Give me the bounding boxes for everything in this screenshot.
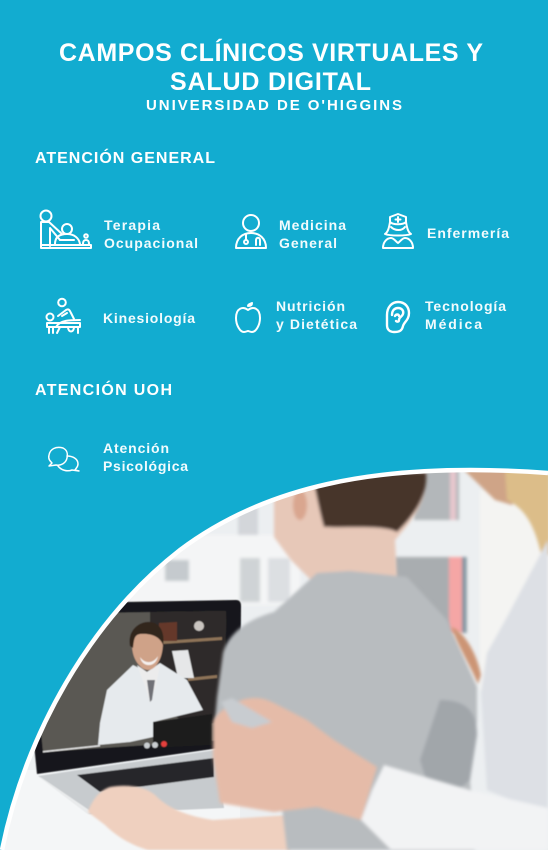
label: Kinesiología: [103, 310, 195, 326]
label: Tecnología: [425, 298, 506, 314]
label: Psicológica: [103, 458, 188, 474]
woman hair: [505, 470, 548, 555]
label: [103, 440, 188, 474]
item: nutrición y dietética: [236, 298, 357, 332]
woman fingers: [451, 627, 481, 684]
item: kinesiología: [46, 299, 195, 333]
doctor coat: [98, 663, 203, 745]
item: enfermería: [383, 214, 509, 248]
title: CAMPOS CLÍNICOS VIRTUALES Y: [59, 38, 483, 67]
screen highlight: [43, 745, 100, 752]
label: [104, 217, 198, 251]
window: [164, 472, 469, 635]
icon: burbujas de diálogo: [49, 447, 79, 471]
child hand and forearm: [88, 786, 290, 850]
label: Ocupacional: [104, 235, 198, 251]
label: Medicina: [279, 217, 346, 233]
call buttons: [144, 742, 150, 748]
screen image: wall: [41, 612, 215, 752]
label: Terapia: [104, 217, 160, 233]
label: General: [279, 235, 337, 251]
label: [425, 298, 506, 332]
bookshelf: [163, 637, 222, 681]
label: Enfermería: [427, 225, 509, 241]
icon: manzana: [236, 303, 260, 332]
laptop base: [38, 750, 224, 814]
heading: atención general: ATENCIÓN GENERAL: [35, 148, 215, 167]
child shirt: [215, 571, 477, 850]
child head and neck: [274, 470, 426, 580]
item: atención psicológica: [49, 440, 188, 474]
table: [0, 770, 240, 850]
sleeve: [361, 765, 548, 850]
label: Nutrición: [276, 298, 345, 314]
item: terapia ocupacional: [40, 210, 198, 251]
screen image: shelf: [150, 611, 226, 730]
icon: medicina general: [236, 215, 266, 248]
room background: [0, 460, 548, 850]
woman: [213, 470, 548, 850]
keyboard: [77, 758, 214, 792]
secondary laptop in video: [153, 714, 212, 748]
child hair: [311, 472, 426, 532]
woman face: [464, 472, 514, 506]
label: [276, 298, 357, 332]
child: [215, 470, 477, 850]
title: SALUD DIGITAL: [170, 68, 371, 96]
woman torso: [481, 540, 548, 815]
label: Atención: [103, 440, 169, 456]
photo: telemedicina: [0, 460, 548, 850]
item: medicina general: [236, 215, 346, 251]
label: [279, 217, 346, 251]
laptop: [20, 600, 241, 814]
icon: enfermería: [383, 214, 413, 248]
item: tecnología médica: [387, 298, 506, 332]
child ear: [293, 490, 307, 520]
hand and arm on shoulder: [213, 698, 377, 820]
shirt detail above hand: [221, 698, 272, 728]
doctor head: [132, 630, 163, 670]
heading: atención uoh: ATENCIÓN UOH: [35, 380, 172, 399]
label: y Dietética: [276, 316, 357, 332]
white curve: [2, 470, 548, 850]
title: [59, 38, 483, 96]
screen frame: [20, 600, 241, 774]
icon: oreja: [387, 302, 409, 332]
subtitle: UNIVERSIDAD DE O'HIGGINS: [146, 97, 402, 114]
label: Médica: [425, 316, 482, 332]
icon: terapia ocupacional: [40, 210, 91, 248]
icon: kinesiología: [46, 299, 80, 333]
